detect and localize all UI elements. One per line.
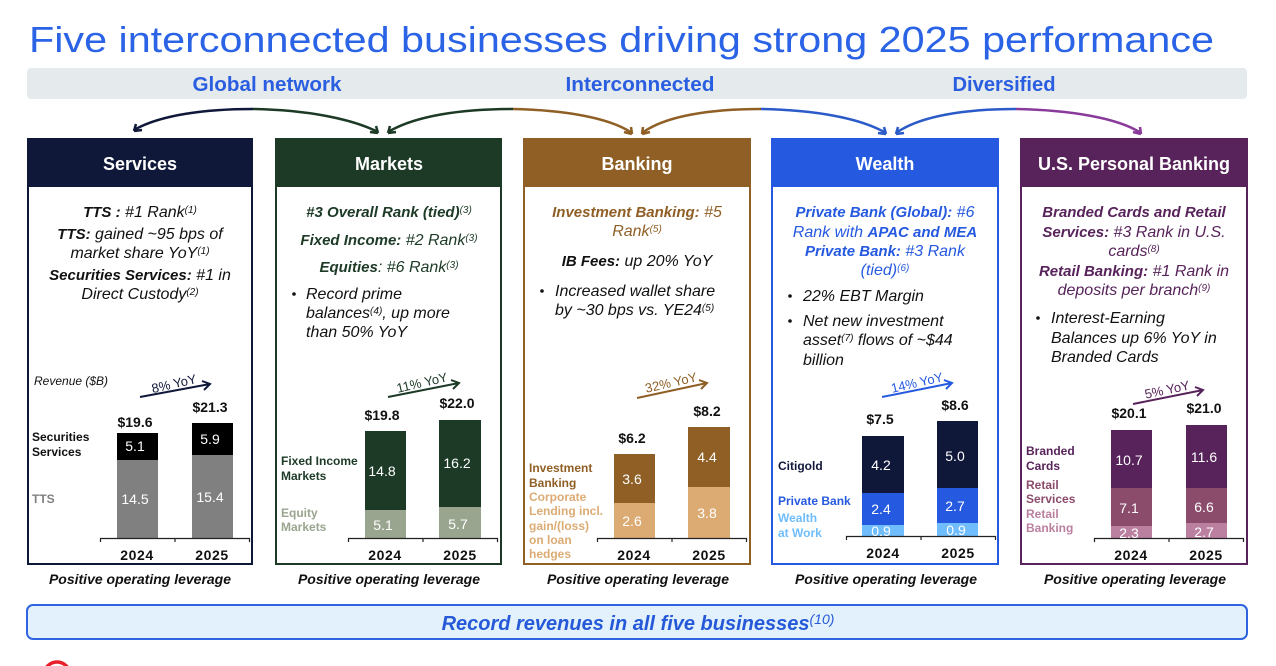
panel: Wealth: Net new investment [803, 313, 944, 330]
panel: Banking: hedges [529, 547, 571, 561]
panel: Banking: gain/(loss) [529, 519, 589, 533]
panel: Services: $21.3 [192, 399, 228, 415]
panel: Markets: , up more [382, 305, 450, 322]
panel: Services: 2025 [195, 547, 229, 563]
panel: Wealth: 2.4 [871, 501, 891, 517]
panel: Wealth: Wealth [778, 511, 817, 525]
panel: Markets: Equity [281, 506, 318, 520]
panel: Markets: 14.8 [368, 463, 396, 479]
panel: Services: 2024 [120, 547, 154, 563]
panel: Services: 5.9 [200, 431, 220, 447]
panel: U.S. Personal Banking: 5% YoY [1143, 377, 1191, 402]
panel: Wealth: Private Bank (Global): #6 [796, 204, 975, 221]
panel: Wealth: (6) [897, 263, 909, 274]
panel: U.S. Personal Banking: (9) [1198, 283, 1210, 294]
panel: U.S. Personal Banking: Services [1026, 492, 1076, 506]
panel: Wealth: (7) [841, 333, 853, 344]
panel: U.S. Personal Banking: Retail [1026, 507, 1059, 521]
panel: Banking: (5) [650, 224, 662, 235]
panel: Banking [523, 138, 751, 564]
panel: U.S. Personal Banking: Branded Cards [1051, 349, 1159, 366]
panel: Markets: 11% YoY [395, 369, 449, 396]
callout: record revenues: Record revenues in all five businesses [442, 613, 810, 635]
captions: positive operating leverage: Positive operating leverage [1044, 571, 1226, 587]
panel: Wealth: 22% EBT Margin [802, 288, 924, 305]
banner: themes: Diversified [952, 73, 1056, 96]
panel: Banking: Increased wallet share [555, 283, 715, 300]
captions: positive operating leverage [49, 571, 1226, 587]
title: Five interconnected businesses driving strong 2025 performance [29, 19, 1214, 60]
panel: Markets [275, 138, 502, 564]
panel: U.S. Personal Banking [1020, 138, 1248, 564]
panel: Wealth: $7.5 [866, 411, 894, 427]
panel: U.S. Personal Banking: Banking [1026, 521, 1073, 535]
panel: Banking: on loan [529, 533, 572, 547]
panel: Services: TTS: gained ~95 bps of [57, 226, 224, 243]
panel: Banking: 2.6 [622, 513, 642, 529]
panel: Wealth: Private Bank [778, 494, 851, 508]
panel: Services: TTS [32, 492, 55, 506]
panel: U.S. Personal Banking: (8) [1147, 244, 1160, 255]
panel: Markets: (3) [446, 260, 459, 271]
panel: Services [27, 138, 253, 564]
panel: Services: TTS : #1 Rank [83, 204, 185, 221]
panel: U.S. Personal Banking: Services: #3 Rank in U.S. [1042, 224, 1226, 241]
panel: Markets: 5.7 [448, 516, 468, 532]
panel: Banking: Rank [612, 223, 650, 240]
panel: Services: Securities [32, 430, 90, 444]
captions: positive operating leverage: Positive operating leverage [49, 571, 231, 587]
panel: U.S. Personal Banking: $20.1 [1111, 405, 1147, 421]
panel: U.S. Personal Banking: deposits per branch [1058, 282, 1198, 299]
captions: positive operating leverage: Positive operating leverage [298, 571, 480, 587]
panel: Banking: (5) [702, 303, 714, 314]
panel: Banking: 3.6 [622, 471, 642, 487]
panel: Banking: 32% YoY [644, 369, 699, 396]
panel: U.S. Personal Banking: U.S. Personal Banking [1038, 154, 1230, 174]
panel: Banking: Corporate [529, 490, 587, 504]
panel: U.S. Personal Banking: Retail Banking: #1 Rank in [1039, 263, 1229, 280]
panel: Markets: 16.2 [443, 455, 471, 471]
panel: U.S. Personal Banking: 11.6 [1191, 449, 1217, 465]
panel: Banking: 2025 [692, 547, 726, 563]
panel: Markets: #3 Overall Rank (tied) [306, 204, 460, 221]
panel: U.S. Personal Banking: $21.0 [1186, 400, 1222, 416]
panel: Markets: (4) [370, 306, 382, 317]
panel: Services: Securities Services: #1 in [49, 267, 231, 284]
panel: U.S. Personal Banking: 6.6 [1194, 499, 1214, 515]
panel: U.S. Personal Banking: Branded Cards and Retail [1042, 204, 1227, 221]
panel: Wealth: 2.7 [945, 498, 965, 514]
panel: Banking: Investment [529, 461, 592, 475]
panel: U.S. Personal Banking: 7.1 [1119, 500, 1139, 516]
panel: U.S. Personal Banking: Branded [1026, 444, 1075, 458]
panel: Markets: Fixed Income: #2 Rank [300, 232, 465, 249]
panel: Wealth: 14% YoY [890, 369, 945, 396]
panel: U.S. Personal Banking: cards [1108, 243, 1147, 260]
panel: U.S. Personal Banking: 2.7 [1194, 524, 1214, 540]
panel: Banking: $6.2 [618, 430, 646, 446]
panel: Markets: Markets [355, 154, 423, 174]
panel: Markets: Equities: #6 Rank [319, 259, 446, 276]
panel: Markets: Markets [281, 520, 327, 534]
panel: Wealth [771, 138, 999, 564]
panel: Services: $19.6 [117, 414, 153, 430]
panel: Services: (1) [197, 246, 210, 257]
icon: logo arc [44, 662, 70, 666]
captions: positive operating leverage: Positive operating leverage [795, 571, 977, 587]
panel: Services: Direct Custody [81, 286, 186, 303]
panel: Services: Services [103, 154, 177, 174]
panel: Wealth: 0.9 [946, 522, 966, 538]
panel: Markets: 5.1 [373, 517, 393, 533]
panel: Services: market share YoY [70, 245, 197, 262]
panel: Wealth: 2025 [941, 545, 975, 561]
panel: U.S. Personal Banking: Cards [1026, 459, 1060, 473]
panel: Banking: $8.2 [693, 403, 721, 419]
panel: U.S. Personal Banking: Interest-Earning [1051, 310, 1165, 327]
panel: U.S. Personal Banking: 2.3 [1119, 525, 1139, 541]
panel: Wealth: 5.0 [945, 448, 965, 464]
panel: Wealth: asset [803, 332, 841, 349]
panel: Wealth: 0.9 [871, 523, 891, 539]
panel: Banking: Lending incl. [529, 504, 603, 518]
panel: Banking: IB Fees: up 20% YoY [562, 253, 714, 270]
panel: Services: 5.1 [125, 438, 145, 454]
panel: U.S. Personal Banking: 10.7 [1115, 452, 1143, 468]
panel: Banking: Banking [529, 476, 576, 490]
panel: Services: Services [32, 445, 82, 459]
panel: U.S. Personal Banking: 2024 [1114, 547, 1148, 563]
panel: Wealth: Citigold [778, 459, 823, 473]
panel: Markets: 2024 [368, 547, 402, 563]
panel: Wealth: 4.2 [871, 457, 891, 473]
panel: Services: Revenue ($B) [34, 374, 108, 388]
panel: U.S. Personal Banking: Retail [1026, 478, 1059, 492]
panel: Services: 8% YoY [150, 371, 198, 396]
panel: Markets: Fixed Income [281, 454, 358, 468]
panel: Markets: balances [306, 305, 370, 322]
panel: Wealth: Rank with APAC and MEA [793, 224, 977, 241]
panel: Banking: by ~30 bps vs. YE24 [555, 302, 702, 319]
panel: Wealth: flows of ~$44 [853, 332, 953, 349]
panel: Markets: Markets [281, 469, 327, 483]
panel: Banking: 3.8 [697, 505, 717, 521]
panel: Wealth: Private Bank: #3 Rank [805, 243, 966, 260]
panel: Banking: 2024 [617, 547, 651, 563]
captions: positive operating leverage: Positive operating leverage [547, 571, 729, 587]
panel: Markets: (3) [460, 205, 472, 216]
panel: Services: 14.5 [121, 491, 149, 507]
callout: record revenues: (10) [810, 611, 834, 627]
panel: Wealth: Wealth [856, 154, 914, 174]
panel: Wealth: billion [803, 352, 844, 369]
connecting arrows [134, 109, 1141, 134]
panel: Services: (1) [185, 205, 197, 216]
panel: Markets: (3) [465, 233, 478, 244]
panel: Markets: Record prime [306, 286, 402, 303]
banner: themes: Interconnected [566, 73, 714, 96]
panel: Wealth: (tied) [861, 262, 897, 279]
panel: Markets: $22.0 [439, 395, 475, 411]
panel: Services: (2) [186, 287, 199, 298]
callout: record revenues [27, 605, 1247, 639]
panel: Markets: 2025 [443, 547, 477, 563]
panel: Markets: $19.8 [364, 407, 400, 423]
panel: Markets: than 50% YoY [306, 324, 408, 341]
panel: Services: 15.4 [196, 489, 224, 505]
panel: Wealth: 2024 [866, 545, 900, 561]
panel: Wealth: $8.6 [941, 397, 969, 413]
banner: themes: Global network [192, 73, 342, 96]
panel: Banking: Banking [601, 154, 673, 174]
panel: Banking: Investment Banking: #5 [552, 204, 722, 221]
panel: U.S. Personal Banking: 2025 [1189, 547, 1223, 563]
banner: themes [27, 68, 1247, 99]
panel: Banking: 4.4 [697, 449, 717, 465]
panel: Wealth: at Work [778, 526, 822, 540]
panel: U.S. Personal Banking: Balances up 6% YoY in [1051, 330, 1217, 347]
